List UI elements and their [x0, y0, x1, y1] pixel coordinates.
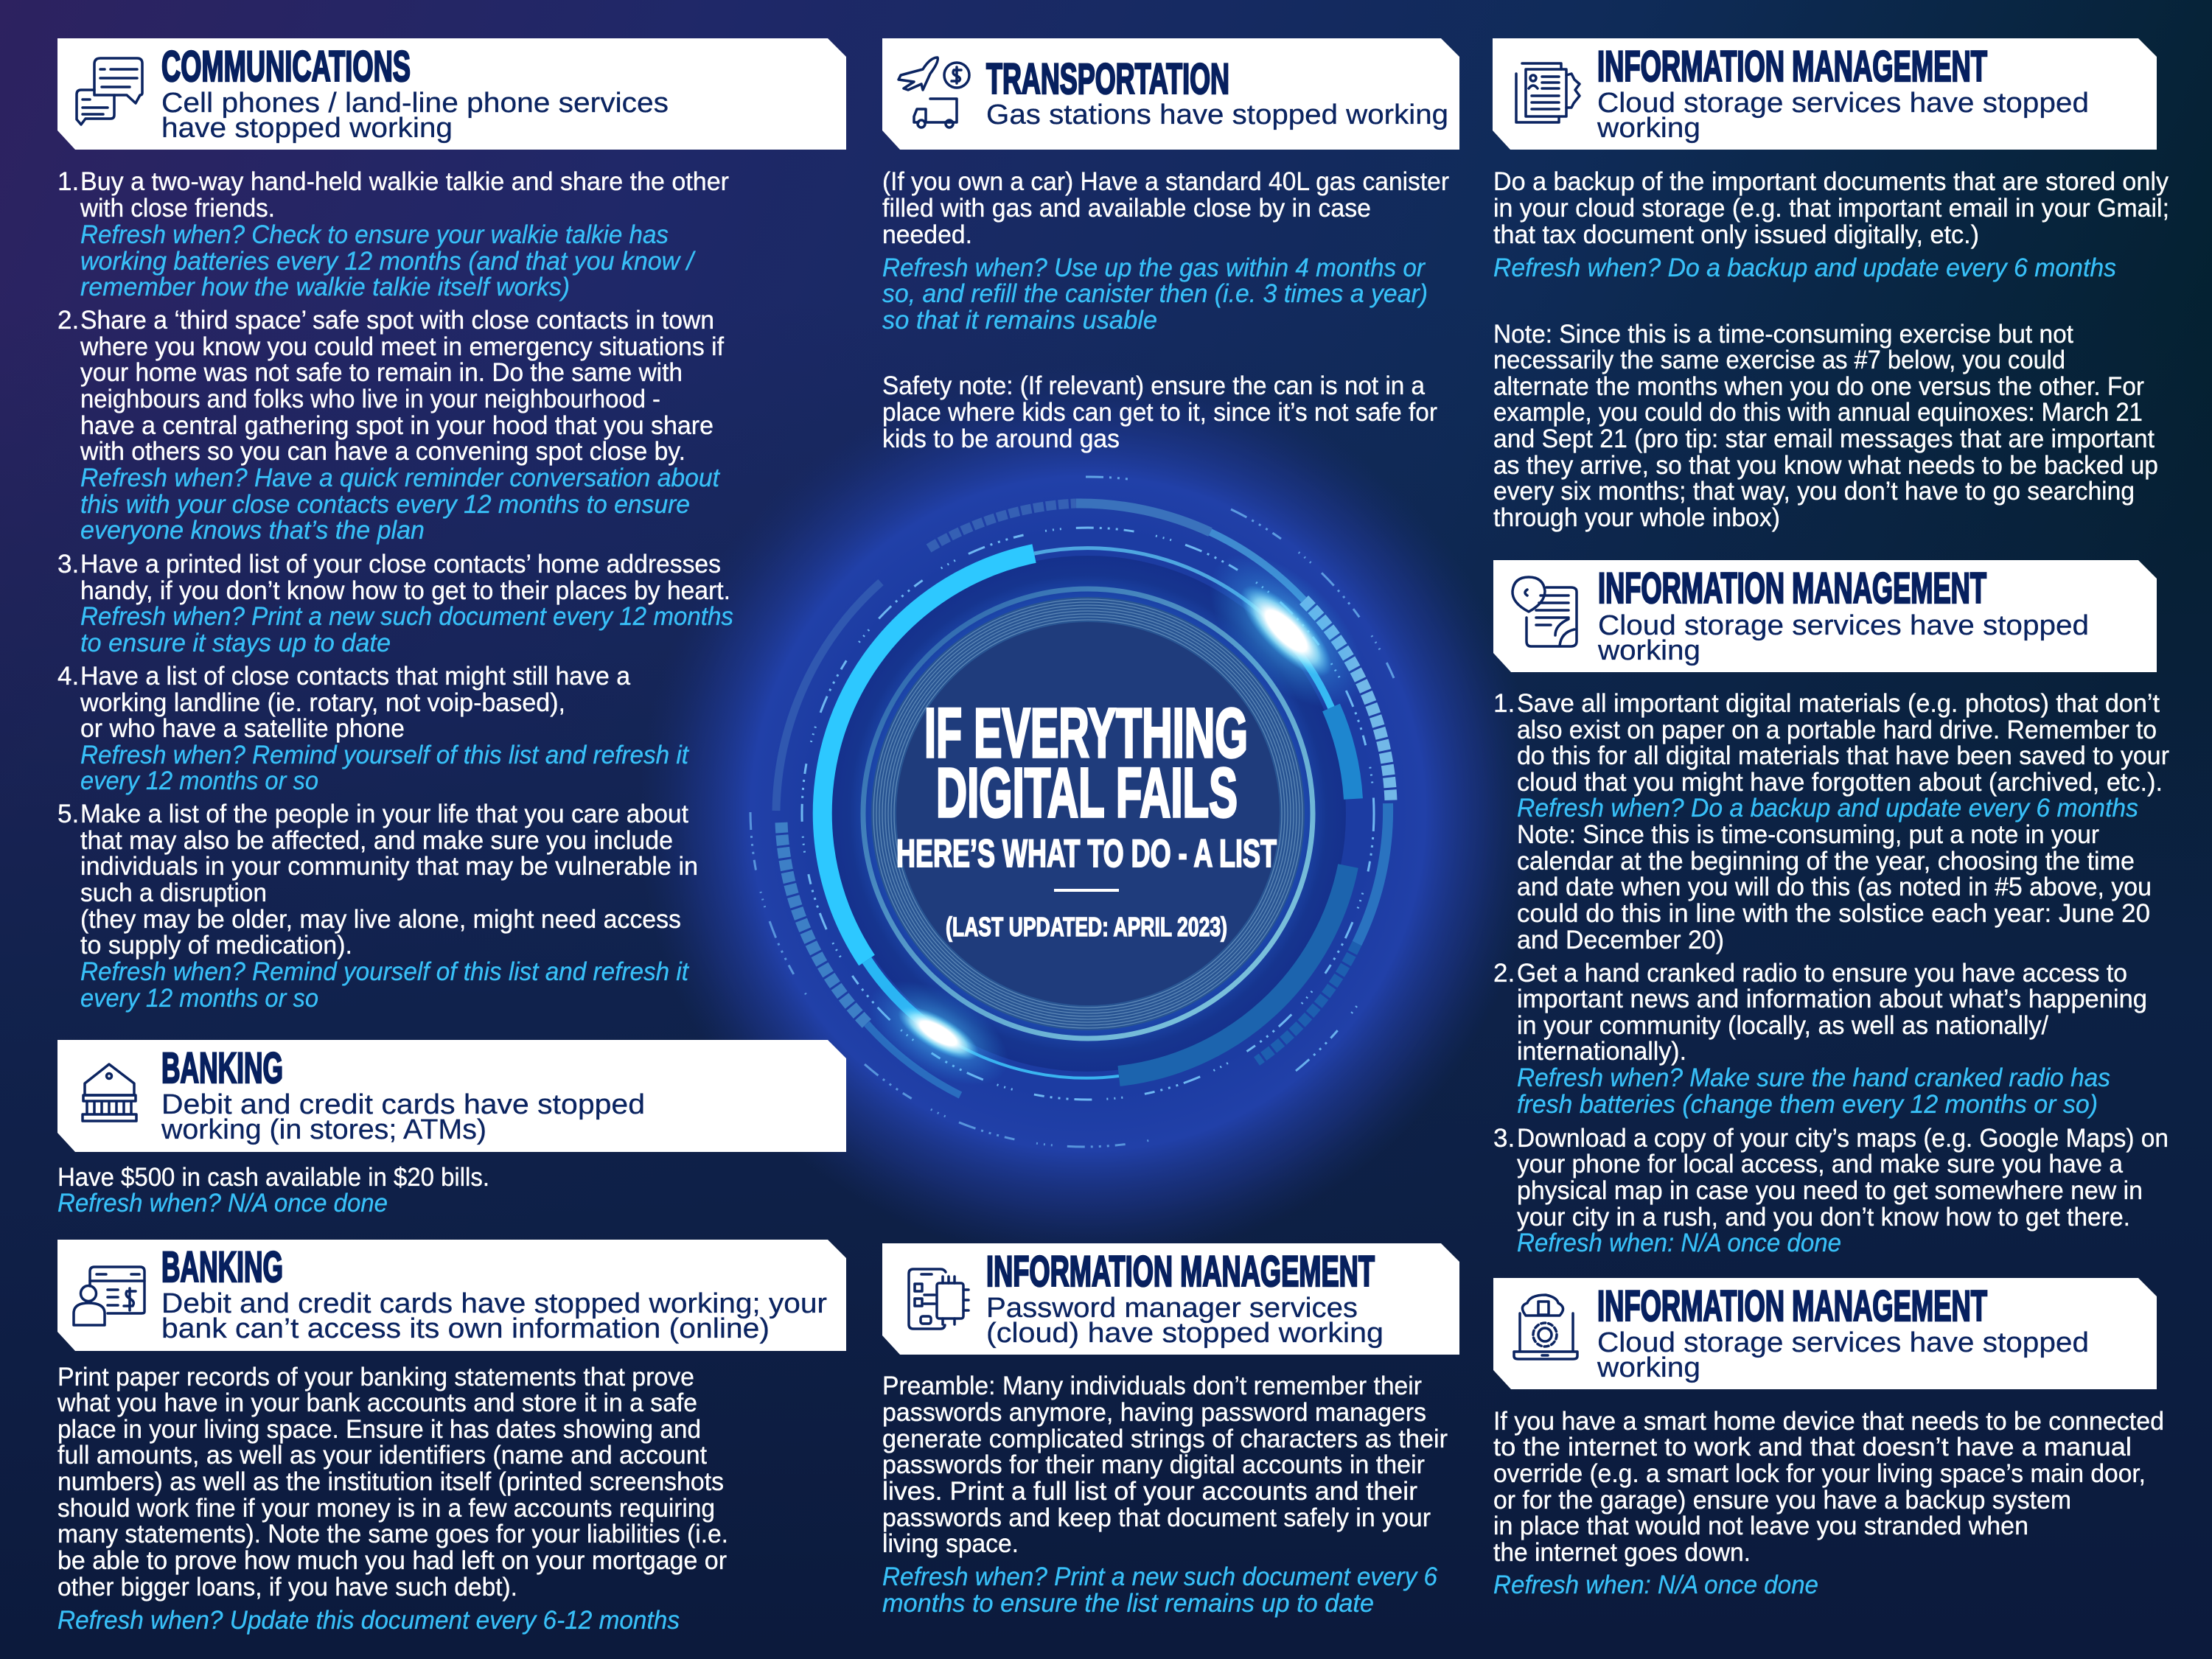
body text: passwords and keep that document safely in your [882, 1503, 1431, 1532]
subheading: working [1597, 635, 1700, 666]
body text: should work fine if your money is in a few accounts requiring [57, 1494, 715, 1523]
item 4: or who have a satellite phone [80, 714, 405, 743]
body text: necessarily the same exercise as #7 below, you could [1493, 346, 2065, 374]
subheading: Cloud storage services have stopped [1597, 1327, 2089, 1358]
body text: Refresh when? Print a new such document every 6 [882, 1562, 1438, 1591]
item 2: neighbours and folks who live in your neighbourhood - [80, 385, 660, 413]
body text: the internet goes down. [1493, 1538, 1751, 1567]
body text: needed. [882, 220, 972, 249]
item 2: Refresh when? Have a quick reminder conversation about [80, 464, 720, 492]
item 1: 1. [57, 167, 79, 196]
item 3: to ensure it stays up to date [80, 629, 391, 657]
item 1: and date when you will do this (as noted in #5 above, you [1517, 873, 2152, 901]
item 2: important news and information about what’s happening [1517, 985, 2147, 1013]
item 2: have a central gathering spot in your hood that you share [80, 411, 714, 440]
body text: or for the garage) ensure you have a backup system [1493, 1486, 2071, 1515]
banner [882, 1243, 1459, 1355]
item 4: 4. [57, 662, 79, 691]
item 3 [1493, 1124, 2169, 1257]
banner [1493, 38, 2157, 150]
item 5: Refresh when? Remind yourself of this list and refresh it [80, 957, 689, 986]
item 5: that may also be affected, and make sure you include [80, 826, 673, 855]
subheading: Cloud storage services have stopped [1598, 610, 2089, 641]
body text: full amounts, as well as your identifiers (name and account [57, 1441, 707, 1470]
body text: living space. [882, 1529, 1019, 1558]
title line 2: DIGITAL FAILS [936, 754, 1238, 832]
panel: transportation [882, 38, 1459, 453]
item 2: 2. [1493, 959, 1515, 988]
subheading [1597, 88, 2089, 144]
subheading: have stopped working [161, 113, 453, 144]
body text: place where kids can get to it, since it’s not safe for [882, 398, 1437, 427]
central circular graphic [638, 364, 1538, 1263]
body text: filled with gas and available close by in case [882, 194, 1371, 223]
panel: password managers [882, 1243, 1459, 1618]
body text [1493, 1407, 2164, 1599]
icon: documents with gear [1516, 63, 1580, 122]
item 1: calendar at the beginning of the year, choosing the time [1517, 847, 2135, 876]
item 3: 3. [57, 550, 79, 579]
body text: as they arrive, so that you know what needs to be backed up [1493, 451, 2158, 480]
banner [1493, 560, 2157, 672]
subheading: Password manager services [986, 1293, 1358, 1324]
item 1: do this for all digital materials that have been saved to your [1517, 741, 2169, 770]
item 1: Buy a two-way hand-held walkie talkie and share the other [80, 167, 729, 196]
item 2: fresh batteries (change them every 12 months or so) [1517, 1090, 2098, 1119]
body text: Refresh when? N/A once done [57, 1189, 388, 1218]
item 4: Refresh when? Remind yourself of this list and refresh it [80, 741, 689, 769]
heading: COMMUNICATIONS [161, 43, 411, 91]
body text: kids to be around gas [882, 425, 1120, 453]
body text: Preamble: Many individuals don’t remember their [882, 1372, 1422, 1400]
panel: information management backup [1493, 38, 2169, 532]
body text: Do a backup of the important documents that are stored only [1493, 167, 2169, 196]
icon: plane, coin and truck [899, 57, 969, 128]
icon: chat bubbles [77, 58, 142, 125]
body text: Note: Since this is a time-consuming exercise but not [1493, 320, 2073, 349]
body text: generate complicated strings of characters as their [882, 1425, 1448, 1453]
heading: INFORMATION MANAGEMENT [1597, 1282, 1987, 1330]
panel: information management smart home [1493, 1278, 2164, 1599]
subtitle: HERE’S WHAT TO DO - A LIST [896, 832, 1277, 876]
body text: in place that would not leave you stranded when [1493, 1512, 2028, 1540]
heading: INFORMATION MANAGEMENT [1597, 43, 1987, 91]
item 3: your city in a rush, and you don’t know how to get there. [1517, 1203, 2130, 1232]
body text: passwords anymore, having password managers [882, 1398, 1426, 1427]
item 3: 3. [1493, 1124, 1515, 1153]
body text: numbers) as well as the institution itself (printed screenshots [57, 1467, 724, 1496]
body text: example, you could do this with annual equinoxes: March 21 [1493, 398, 2143, 427]
subheading: Cell phones / land-line phone services [161, 88, 669, 119]
item 5: (they may be older, may live alone, might need access [80, 905, 681, 934]
body text: Refresh when? Do a backup and update every 6 months [1493, 254, 2116, 282]
body text: so that it remains usable [882, 306, 1157, 335]
body text: If you have a smart home device that needs to be connected [1493, 1407, 2164, 1436]
item 5 [57, 800, 698, 1013]
body text: place in your living space. Ensure it has dates showing and [57, 1415, 701, 1444]
panel: banking cash [57, 1040, 846, 1218]
body text: in your cloud storage (e.g. that important email in your Gmail; [1493, 194, 2169, 223]
subheading [161, 88, 669, 144]
body text: through your whole inbox) [1493, 503, 1780, 532]
item 1 [57, 167, 729, 301]
heading: TRANSPORTATION [986, 55, 1229, 103]
body text: be able to prove how much you had left on your mortgage or [57, 1546, 727, 1575]
icon: bank building [83, 1064, 136, 1121]
subheading [161, 1089, 645, 1145]
body text: every six months; that way, you don’t have to go searching [1493, 477, 2135, 506]
icon: laptop with cloud and gear [1514, 1295, 1577, 1359]
item 2: with others so you can have a convening spot close by. [80, 437, 685, 466]
item 4: every 12 months or so [80, 766, 318, 795]
item 1: Note: Since this is time-consuming, put a note in your [1517, 820, 2099, 849]
title line 1: IF EVERYTHING [924, 694, 1248, 772]
item 1: working batteries every 12 months (and that you know / [80, 247, 696, 276]
item 2: internationally). [1517, 1037, 1686, 1066]
last updated: (LAST UPDATED: APRIL 2023) [946, 912, 1227, 942]
body text: Refresh when: N/A once done [1493, 1571, 1818, 1599]
banner [57, 38, 846, 150]
icon: lightbulb and document [1513, 577, 1577, 646]
subheading: bank can’t access its own information (online) [161, 1313, 770, 1344]
body text [57, 1163, 489, 1218]
item 3: Refresh when? Print a new such document every 12 months [80, 602, 733, 631]
body text: so, and refill the canister then (i.e. 3 times a year) [882, 279, 1428, 308]
icon: bank statement user [74, 1267, 144, 1325]
subheading [1597, 1327, 2089, 1383]
item 2: in your community (locally, as well as nationally/ [1517, 1011, 2048, 1040]
item 5: every 12 months or so [80, 984, 318, 1013]
subheading: (cloud) have stopped working [986, 1318, 1384, 1349]
panel: information management hardware [1493, 560, 2169, 1257]
item 1: could do this in line with the solstice each year: June 20 [1517, 899, 2150, 928]
item 1: Save all important digital materials (e.g. photos) that don’t [1517, 689, 2160, 718]
item 5: individuals in your community that may be vulnerable in [80, 852, 698, 881]
subheading: working (in stores; ATMs) [161, 1114, 486, 1145]
banner [57, 1240, 846, 1351]
heading: BANKING [161, 1243, 283, 1291]
body text: Refresh when? Use up the gas within 4 months or [882, 254, 1426, 282]
item 3: handy, if you don’t know how to get to their places by heart. [80, 576, 730, 605]
body text: alternate the months when you do one versus the other. For [1493, 372, 2144, 401]
body text: what you have in your bank accounts and store it in a safe [57, 1389, 697, 1417]
body text: Safety note: (If relevant) ensure the can is not in a [882, 371, 1426, 400]
body text: to the internet to work and that doesn’t have a manual [1493, 1433, 2132, 1461]
item 3: Have a printed list of your close contacts’ home addresses [80, 550, 721, 579]
body text: lives. Print a full list of your accounts and their [882, 1477, 1417, 1506]
panel: communications [57, 38, 846, 1013]
item 2: this with your close contacts every 12 months to ensure [80, 490, 690, 519]
subheading: working [1597, 113, 1700, 144]
title block [896, 694, 1277, 942]
panel: banking records [57, 1240, 846, 1635]
body text [57, 1363, 728, 1635]
item 5: to supply of medication). [80, 931, 352, 960]
icon: phone with chip [909, 1269, 969, 1329]
item 2: everyone knows that’s the plan [80, 516, 425, 545]
item 5: 5. [57, 800, 79, 828]
subheading [986, 1293, 1384, 1349]
item 2: Refresh when? Make sure the hand cranked radio has [1517, 1063, 2110, 1092]
item 1: Refresh when? Check to ensure your walkie talkie has [80, 220, 669, 249]
item 2: Get a hand cranked radio to ensure you have access to [1517, 959, 2127, 988]
item 2: where you know you could meet in emergency situations if [80, 332, 724, 361]
banner [882, 38, 1459, 150]
subheading: Debit and credit cards have stopped [161, 1089, 645, 1120]
body text: Have $500 in cash available in $20 bills. [57, 1163, 489, 1192]
item 1 [1493, 689, 2169, 954]
subheading: working [1597, 1352, 1700, 1383]
item 3: your phone for local access, and make sure you have a [1517, 1150, 2124, 1178]
subheading [1597, 610, 2089, 666]
subheading [161, 1288, 827, 1344]
body text: months to ensure the list remains up to date [882, 1589, 1374, 1618]
heading: INFORMATION MANAGEMENT [1598, 565, 1986, 612]
item 4 [57, 662, 689, 795]
item 1: remember how the walkie talkie itself works) [80, 273, 570, 301]
item 1: and December 20) [1517, 926, 1724, 954]
subheading: Gas stations have stopped working [986, 99, 1448, 130]
heading: BANKING [161, 1044, 283, 1092]
body text: Print paper records of your banking statements that prove [57, 1363, 694, 1391]
item 1: also exist on paper on a portable hard drive. Remember to [1517, 716, 2157, 744]
body text: Refresh when? Update this document every 6-12 months [57, 1606, 680, 1635]
item 3: physical map in case you need to get somewhere new in [1517, 1176, 2143, 1205]
item 1: Refresh when? Do a backup and update every 6 months [1517, 794, 2138, 822]
item 3: Refresh when: N/A once done [1517, 1229, 1841, 1257]
item 2: your home was not safe to remain in. Do the same with [80, 358, 683, 387]
body text: (If you own a car) Have a standard 40L gas canister [882, 167, 1449, 196]
subheading: Cloud storage services have stopped [1597, 88, 2089, 119]
body text: many statements). Note the same goes for your liabilities (i.e. [57, 1520, 728, 1548]
banner [1493, 1278, 2157, 1389]
item 2: 2. [57, 306, 79, 335]
subheading: Debit and credit cards have stopped working; your [161, 1288, 827, 1319]
item 2 [1493, 959, 2147, 1119]
item 3 [57, 550, 733, 657]
item 1: 1. [1493, 689, 1515, 718]
body text [882, 167, 1449, 453]
item 5: Make a list of the people in your life that you care about [80, 800, 688, 828]
body text: passwords for their many digital accounts in their [882, 1450, 1425, 1479]
body text: other bigger loans, if you have such debt). [57, 1573, 517, 1602]
heading: INFORMATION MANAGEMENT [986, 1248, 1375, 1296]
item 4: Have a list of close contacts that might still have a [80, 662, 631, 691]
divider [1054, 889, 1119, 892]
body text [882, 1372, 1448, 1618]
body text: and Sept 21 (pro tip: star email messages that are important [1493, 425, 2155, 453]
item 1: cloud that you might have forgotten about (archived, etc.). [1517, 768, 2163, 797]
item 3: Download a copy of your city’s maps (e.g. Google Maps) on [1517, 1124, 2169, 1153]
item 4: working landline (ie. rotary, not voip-based), [80, 688, 565, 717]
banner [57, 1040, 846, 1152]
body text: that tax document only issued digitally, etc.) [1493, 220, 1979, 249]
item 2 [57, 306, 724, 545]
item 1: with close friends. [80, 194, 275, 223]
item 2: Share a ‘third space’ safe spot with close contacts in town [80, 306, 714, 335]
body text [1493, 167, 2169, 532]
item 5: such a disruption [80, 879, 267, 907]
body text: override (e.g. a smart lock for your living space’s main door, [1493, 1459, 2146, 1488]
